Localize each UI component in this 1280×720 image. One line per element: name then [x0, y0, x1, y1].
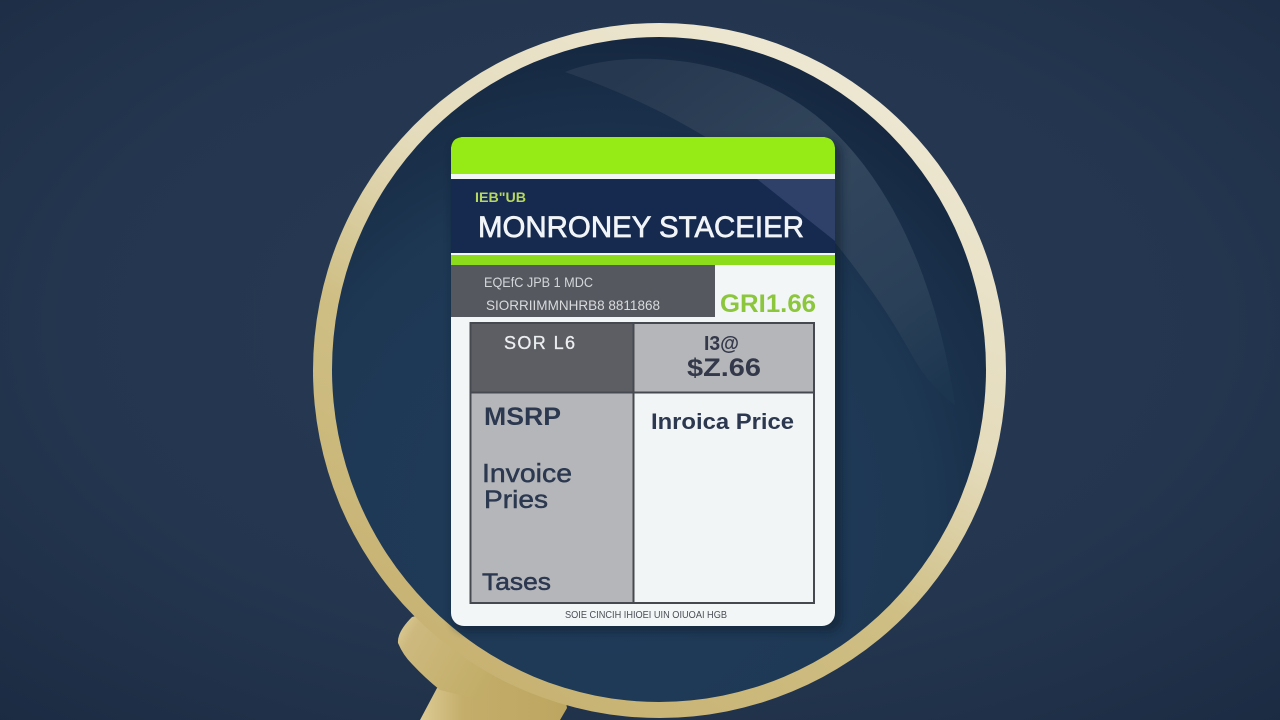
sticker card: [451, 137, 835, 626]
grey info bar: [451, 265, 715, 317]
cell: bottom left: [470, 393, 634, 603]
grey info bar: EQEfC JPB 1 MDC: [484, 274, 593, 290]
cell: bottom right: [634, 393, 814, 603]
grey info bar: SIORRIIMMNHRB8 8811868: [486, 297, 660, 313]
Tases: Tases: [482, 569, 551, 596]
lens glass: [332, 37, 986, 702]
green stripe: [451, 255, 835, 265]
cell: top left: [470, 323, 634, 393]
green header: [451, 137, 835, 174]
price: GRI1.66: [720, 290, 816, 318]
lens ring: [313, 23, 1006, 718]
table: [470, 323, 814, 603]
handle grip: [420, 660, 567, 720]
sticker shadow: [452, 140, 842, 632]
cell: top right: [634, 323, 814, 393]
top right value: $Z.66: [687, 354, 761, 382]
title: MONRONEY STACEIER: [478, 211, 804, 244]
MSRP: MSRP: [484, 403, 561, 431]
small label: IEB"UB: [475, 189, 526, 205]
top left label: SOR L6: [504, 333, 575, 353]
footer note: SOIE CINCIH IHIOEI UIN OIUOAI HGB: [565, 609, 727, 621]
Pries: Pries: [484, 486, 548, 514]
Invoice Price: Inroica Price: [651, 409, 794, 434]
icon: magnifying glass lens: [313, 23, 1006, 718]
top right label: I3@: [704, 333, 739, 355]
navy title band: [451, 179, 835, 253]
panel: sticker: [451, 137, 842, 632]
lens glare: [565, 59, 955, 405]
icon: magnifying glass handle: [398, 610, 567, 720]
Invoice: Invoice: [482, 458, 572, 488]
handle collar: [398, 610, 500, 700]
